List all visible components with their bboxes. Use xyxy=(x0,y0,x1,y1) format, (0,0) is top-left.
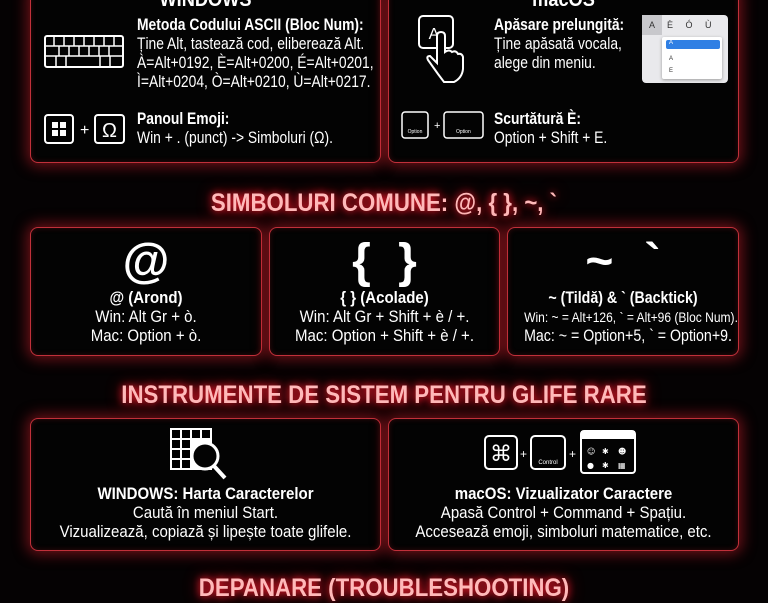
text: char viewer: Accesează emoji, simboluri matematice, etc. xyxy=(415,523,712,541)
text: tilde backtick: ~ (Tildă) & ` (Backtick) xyxy=(548,289,698,307)
icon: win + omega: Ω xyxy=(102,120,117,142)
text: at: @ (Arond) xyxy=(109,289,183,307)
text: at xyxy=(91,289,201,345)
icon: shortcut keys: ● xyxy=(587,461,594,470)
icon: accent menu: E xyxy=(669,68,673,74)
icon: win + omega xyxy=(44,114,125,144)
icon: shortcut keys: ✱ xyxy=(602,461,609,470)
icon: keyboard xyxy=(44,35,124,68)
glyph: at: @ xyxy=(123,235,169,288)
text: ascii method: Metoda Codului ASCII (Bloc Num): xyxy=(137,16,364,34)
text: char viewer: macOS: Vizualizator Caractere xyxy=(455,485,672,503)
glyph: braces: { } xyxy=(352,235,417,288)
icon: win + omega: + xyxy=(80,122,89,139)
text: long press: Ține apăsată vocala, xyxy=(494,35,622,53)
text: emoji panel: Win + . (punct) -> Simboluri (Ω). xyxy=(137,129,333,147)
icon: shortcut keys: + xyxy=(569,447,576,461)
icon: shortcut keys: + xyxy=(520,447,527,461)
text: shortcut e: Scurtătură È: xyxy=(494,110,581,128)
icon: accent menu: A xyxy=(669,56,673,62)
icon: option keys: Option xyxy=(408,129,423,135)
text: at: Mac: Option + ò. xyxy=(91,327,201,345)
text: shortcut e xyxy=(494,109,607,147)
icon: accent menu: A xyxy=(669,40,673,46)
glyph: tilde backtick: ~ ` xyxy=(585,235,661,288)
text: braces: { } (Acolade) xyxy=(340,289,429,307)
heading: common symbols: SIMBOLURI COMUNE: @, { }, ~, ` xyxy=(211,189,557,217)
panel: windows char map xyxy=(30,418,381,551)
panel: braces xyxy=(269,227,500,356)
text: char map: WINDOWS: Harta Caracterelor xyxy=(97,485,314,503)
icon: shortcut keys xyxy=(484,430,636,474)
icon: accent menu xyxy=(642,15,728,83)
icon: hand press xyxy=(418,15,464,83)
text: char map: Vizualizează, copiază și lipește toate glifele. xyxy=(60,523,351,541)
icon: option keys xyxy=(401,111,484,139)
text: char viewer: Apasă Control + Command + Spațiu. xyxy=(441,504,686,522)
text: braces: Win: Alt Gr + Shift + è / +. xyxy=(300,308,469,326)
text: char viewer xyxy=(415,485,712,541)
heading: system tools: INSTRUMENTE DE SISTEM PENTRU GLIFE RARE xyxy=(121,381,647,409)
text: tilde backtick xyxy=(524,289,738,345)
icon: hand press: A xyxy=(429,26,440,43)
icon: accent menu: A xyxy=(649,20,655,30)
panel: windows xyxy=(30,0,381,163)
icon: shortcut keys: ⌘ xyxy=(490,442,512,467)
text: char map xyxy=(60,485,351,541)
icon: shortcut keys: Control xyxy=(538,460,558,466)
icon: char map xyxy=(170,428,226,480)
text: tilde backtick: Win: ~ = Alt+126, ` = Alt+96 (Bloc Num). xyxy=(524,309,738,325)
icon: accent menu: È Ó Ù xyxy=(667,20,712,30)
panel: at xyxy=(30,227,262,356)
text: at: Win: Alt Gr + ò. xyxy=(95,308,197,326)
text: long press: alege din meniu. xyxy=(494,54,596,72)
text: ascii method: À=Alt+0192, È=Alt+0200, É=Alt+0201, xyxy=(137,54,374,72)
icon: shortcut keys: ☺ xyxy=(587,447,595,456)
text: emoji panel xyxy=(137,110,333,147)
panel: mac char viewer xyxy=(388,418,739,551)
icon: option keys: + xyxy=(434,120,440,132)
heading: troubleshooting: DEPANARE (TROUBLESHOOTING) xyxy=(199,574,569,602)
icon: option keys: Option xyxy=(456,129,471,135)
text: ascii method xyxy=(137,16,374,91)
text: long press xyxy=(494,16,624,72)
text: ascii method: Ține Alt, tastează cod, eliberează Alt. xyxy=(137,35,364,53)
text: long press: Apăsare prelungită: xyxy=(494,16,624,34)
icon: shortcut keys: ☻ xyxy=(618,447,626,456)
text: ascii method: Ì=Alt+0204, Ò=Alt+0210, Ù=Alt+0217. xyxy=(137,73,370,91)
icon: shortcut keys: ✱ xyxy=(602,447,609,456)
text: braces xyxy=(295,289,474,345)
text: char map: Caută în meniul Start. xyxy=(133,504,278,522)
panel: macos xyxy=(388,0,739,163)
text: shortcut e: Option + Shift + E. xyxy=(494,129,607,147)
text: braces: Mac: Option + Shift + è / +. xyxy=(295,327,474,345)
text: tilde backtick: Mac: ~ = Option+5, ` = Option+9. xyxy=(524,327,732,345)
panel: tilde backtick xyxy=(507,227,739,356)
text: emoji panel: Panoul Emoji: xyxy=(137,110,229,128)
icon: shortcut keys: ▦ xyxy=(618,461,626,470)
